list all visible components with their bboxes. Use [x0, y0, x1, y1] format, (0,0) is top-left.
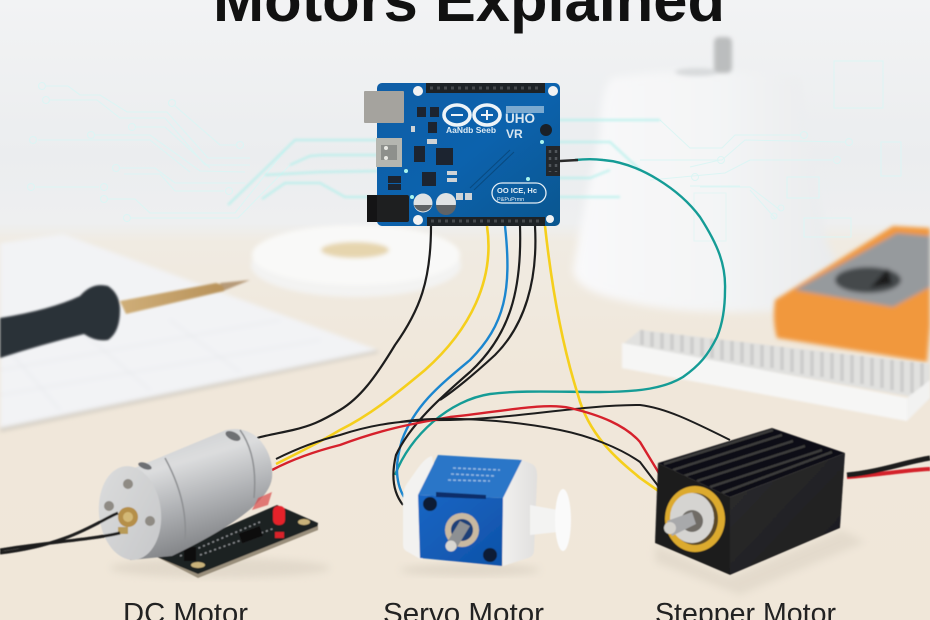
power jack — [367, 195, 409, 222]
bearing ring — [445, 513, 479, 547]
top header — [426, 83, 545, 93]
logo label: AaNdb Seeb — [446, 125, 496, 135]
multimeter screen — [795, 233, 930, 307]
white coupling — [530, 489, 571, 551]
can grooves — [165, 430, 255, 540]
shadow — [110, 558, 330, 578]
red reflection — [252, 492, 272, 510]
dc motor assembly — [0, 429, 330, 578]
circuit traces left — [28, 82, 290, 222]
vase screw — [675, 37, 732, 76]
second black wire to servo — [440, 226, 535, 400]
face holes — [104, 479, 155, 526]
version label: VR — [506, 127, 523, 141]
servo shadow — [400, 564, 540, 576]
ellipse label — [492, 183, 546, 203]
usb port — [376, 138, 402, 167]
heatsink top — [658, 428, 845, 497]
gold coil — [665, 486, 725, 552]
iron handle — [0, 285, 120, 358]
ring gold centre — [321, 242, 389, 258]
fins — [664, 430, 832, 493]
can slots — [137, 429, 242, 471]
servo motor — [400, 455, 571, 576]
paper sheet — [0, 234, 378, 432]
right white cap — [500, 459, 537, 566]
capacitors — [414, 193, 456, 215]
white ring on table — [251, 225, 461, 297]
shaft — [446, 521, 470, 549]
motor front face — [94, 463, 166, 563]
stepper motor — [655, 428, 930, 595]
chips — [388, 107, 453, 190]
multimeter — [774, 226, 930, 362]
teal wire — [395, 159, 725, 475]
white vase in background — [573, 71, 850, 312]
mounting holes — [413, 86, 558, 225]
red wire — [272, 406, 668, 488]
stepper shadow — [655, 530, 865, 595]
heatsink right face — [730, 453, 845, 575]
multimeter dial — [835, 267, 901, 293]
motor output wires — [0, 513, 120, 553]
stepper front face — [655, 463, 730, 575]
right header — [546, 146, 560, 176]
shaft — [667, 512, 696, 536]
glow dots — [404, 140, 544, 199]
soldering iron — [0, 280, 250, 358]
circuit traces right — [640, 61, 901, 241]
usb b connector — [364, 91, 404, 123]
blue front — [418, 495, 503, 566]
logo — [444, 105, 500, 125]
breadboard base — [622, 343, 930, 421]
iron shaft — [120, 283, 224, 314]
arduino board — [364, 83, 560, 226]
ellipse label: P&PuPrmn — [497, 197, 524, 203]
black wire across table — [276, 405, 730, 459]
front holes — [423, 497, 497, 562]
driver pcb — [157, 505, 318, 578]
teal wire black end — [560, 160, 578, 161]
lower black wire — [400, 419, 665, 495]
motor terminal — [118, 507, 138, 534]
silver ring — [670, 493, 714, 543]
breadboard — [622, 330, 930, 421]
motor can — [120, 429, 272, 560]
breadboard pins — [642, 330, 922, 395]
black wire to dc motor — [257, 226, 431, 438]
yellow wire to dc motor — [276, 226, 488, 464]
left white cap — [403, 456, 440, 560]
uno label: UHO — [505, 111, 535, 126]
red led — [273, 506, 285, 538]
ellipse label: OO ICE, Hc — [497, 186, 537, 195]
uno top label — [506, 106, 544, 113]
right cable — [847, 458, 930, 477]
small components — [411, 126, 472, 200]
dark component — [540, 124, 552, 136]
glowing traces near board — [228, 120, 660, 205]
yellow wire to stepper — [545, 226, 660, 492]
front slot — [436, 492, 486, 499]
blue wire to servo — [397, 226, 507, 497]
top embossing — [448, 468, 500, 481]
bottom header — [427, 217, 545, 226]
iron tip — [220, 280, 250, 291]
blue top — [418, 455, 522, 498]
traces on pcb — [470, 150, 514, 190]
pcb — [377, 83, 560, 226]
black wire to servo — [393, 226, 520, 505]
